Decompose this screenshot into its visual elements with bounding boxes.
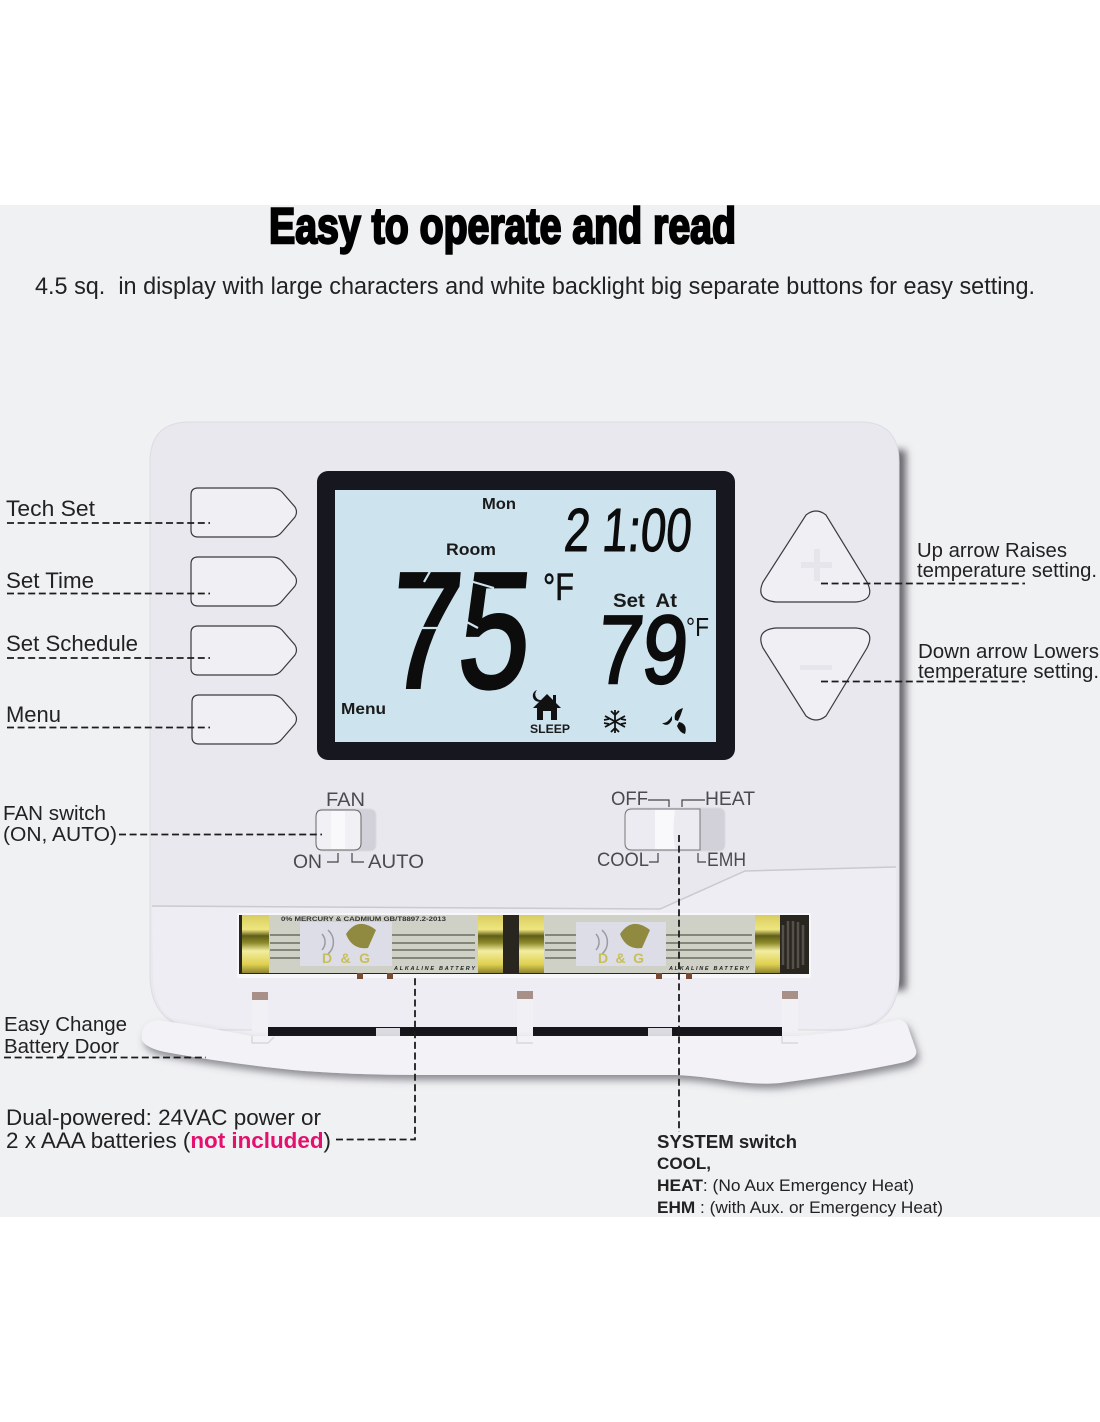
label: SYSTEM switch: COOL, <box>657 1155 711 1173</box>
button: Menu <box>192 695 296 744</box>
fan labels: AUTO <box>368 852 424 873</box>
label: FAN switch: (ON, AUTO) <box>3 824 117 846</box>
set at label: Set At <box>613 591 678 612</box>
button: Tech Set <box>191 488 296 537</box>
set temperature: 79 <box>593 595 693 704</box>
icon: snowflake <box>604 710 626 733</box>
device body <box>150 422 899 1030</box>
button: Set Schedule <box>191 626 296 675</box>
system switch <box>597 789 755 871</box>
label: Easy Change Battery Door <box>4 1014 206 1058</box>
system slot <box>625 808 725 851</box>
label: Set Schedule: Set Schedule <box>6 631 138 656</box>
system labels: EMH <box>707 850 746 871</box>
battery compartment <box>237 913 811 979</box>
room temperature: 75 <box>382 538 539 722</box>
LCD display <box>317 471 735 760</box>
door hinge feet <box>252 1036 798 1043</box>
system labels: COOL <box>597 850 649 871</box>
door gap <box>268 1027 782 1036</box>
room degree unit: °F <box>543 567 574 609</box>
label: Dual-powered <box>6 975 415 1153</box>
system labels: OFF <box>611 789 648 810</box>
label: FAN switch <box>3 803 322 846</box>
icon: sleep house <box>530 690 570 736</box>
label: Up arrow: Up arrow Raises <box>917 540 1067 562</box>
battery 1 <box>242 915 503 973</box>
system labels: HEAT <box>705 789 755 810</box>
label: Down arrow <box>821 641 1099 683</box>
down arrow button <box>761 628 870 720</box>
fan switch <box>293 790 424 873</box>
battery 1: 0% MERCURY & CADMIUM GB/T8897.2-2013 <box>281 916 446 923</box>
menu label: Menu <box>341 701 386 718</box>
clock readout: 2 1:00 <box>562 496 695 564</box>
battery clips <box>357 973 692 979</box>
fan labels: ON <box>293 852 322 873</box>
background panel <box>0 205 1100 1217</box>
label: SYSTEM switch: EHM : (with Aux. or Emergency Heat) <box>657 1199 943 1217</box>
battery 2 <box>519 915 780 973</box>
system labels <box>597 789 755 871</box>
label: Up arrow <box>821 540 1097 584</box>
label: SYSTEM switch: HEAT: (No Aux Emergency Heat) <box>657 1177 914 1195</box>
label: Down arrow: temperature setting. <box>918 661 1099 683</box>
label: SYSTEM switch <box>657 835 943 1217</box>
label: Down arrow: Down arrow Lowers <box>918 641 1099 663</box>
button: Set Time <box>191 557 296 606</box>
label: Dual-powered: 2 x AAA batteries (not included) <box>6 1128 331 1153</box>
fan labels <box>293 790 424 873</box>
room label: Room <box>446 540 496 559</box>
set degree unit: °F <box>686 612 709 642</box>
label: Tech Set: Tech Set <box>6 496 95 521</box>
battery 1: D&G <box>322 950 370 966</box>
label: Easy Change Battery Door: Easy Change <box>4 1014 127 1036</box>
door hinges <box>252 991 798 1040</box>
thermostat device <box>150 422 906 1040</box>
battery 1: ALKALINE BATTERY <box>393 966 476 972</box>
battery door <box>142 1020 916 1084</box>
fan labels: FAN <box>326 790 365 811</box>
label: Menu: Menu <box>6 702 61 727</box>
fan knob <box>316 810 361 850</box>
system knob <box>625 809 700 850</box>
battery spring <box>783 921 803 969</box>
label: Easy Change Battery Door: Battery Door <box>4 1036 119 1058</box>
LCD bezel <box>317 471 735 760</box>
door clips <box>376 1028 672 1036</box>
title: Easy to operate and read <box>269 198 736 254</box>
label: Up arrow: temperature setting. <box>917 560 1097 582</box>
up arrow button <box>761 511 870 602</box>
label: Set Time: Set Time <box>6 568 94 593</box>
label: Dual-powered: Dual-powered: 24VAC power or <box>6 1105 321 1130</box>
label: FAN switch: FAN switch <box>3 803 106 825</box>
battery 2: ALKALINE BATTERY <box>668 966 750 972</box>
battery 2: D&G <box>598 950 644 966</box>
subtitle: 4.5 sq. in display with large characters and white backlight big separate buttons for easy setting. <box>35 273 1035 300</box>
icon: sleep house: SLEEP <box>530 722 570 736</box>
lower compartment <box>152 867 896 1029</box>
LCD screen <box>335 490 716 742</box>
icon: fan <box>662 708 686 734</box>
label: SYSTEM switch: SYSTEM switch <box>657 1132 797 1152</box>
fan slot <box>316 809 376 851</box>
device right shadow <box>892 450 906 990</box>
day label: Mon <box>482 496 516 513</box>
